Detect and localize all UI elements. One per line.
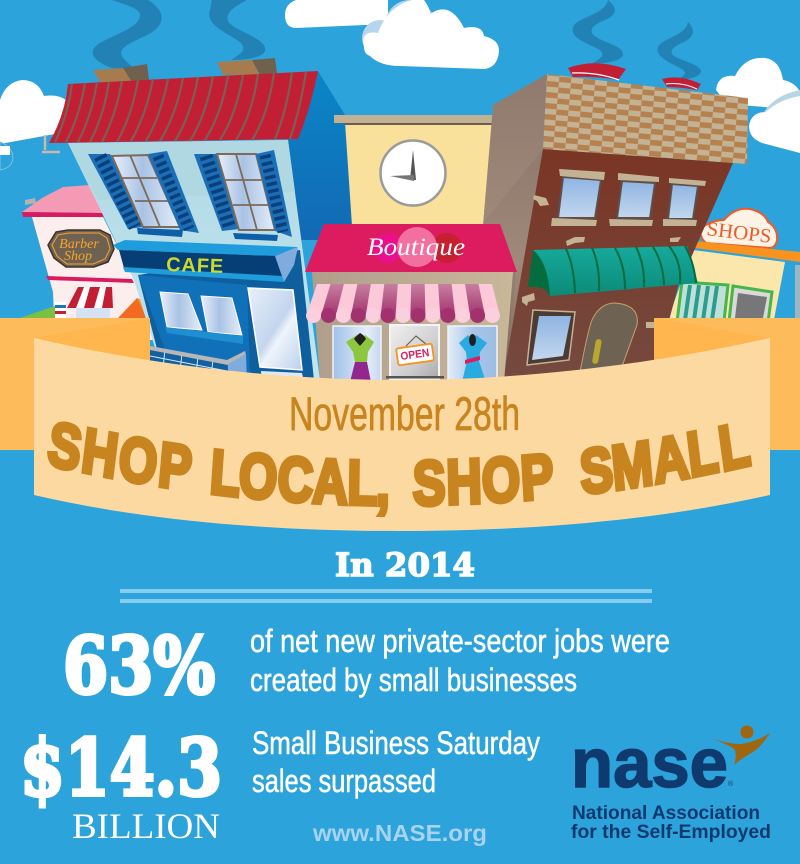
barber awning: [67, 287, 113, 308]
building: clock tower: [334, 115, 505, 226]
umbrella: [118, 298, 168, 326]
smoke: brick right: [658, 22, 701, 80]
cloud: right front edge: [764, 90, 800, 113]
cafe sign underline: [123, 267, 284, 282]
green hill: [20, 306, 55, 325]
clock: [380, 140, 446, 206]
cafe left window group: [88, 151, 199, 237]
brick facade: [503, 149, 733, 380]
logo wordmark: nase: [571, 724, 728, 802]
barber sign: [48, 230, 114, 267]
window 2: [609, 173, 659, 226]
open sign: OPEN: [400, 347, 430, 363]
main headline: SHOP LOCAL, SHOP SMALL: [44, 408, 754, 519]
stat: 63 percent description: created by small businesses: [250, 662, 577, 698]
antenna: [42, 135, 60, 152]
chimney left: [93, 64, 149, 82]
left window muntins: [120, 155, 168, 227]
shops window left: [676, 282, 728, 330]
stat: 14.3: $14.3: [20, 723, 222, 814]
barber wall: [32, 217, 155, 340]
stat: 63 percent description: of net new private-sector jobs were: [250, 623, 670, 659]
awning ribs: [566, 246, 696, 293]
banner right fold shade: [654, 318, 770, 364]
cloud: right back: [716, 58, 800, 110]
smoke: brick left: [573, 0, 623, 64]
barber awning stripes: [67, 287, 113, 308]
logo name: for the Self-Employed: [571, 822, 771, 843]
cafe side wall: [288, 71, 354, 240]
right window sill: [233, 233, 278, 241]
chimney right: [217, 58, 277, 75]
brick lower side: [484, 149, 543, 380]
cafe lower window right: [201, 296, 242, 335]
cafe lower window left: [160, 292, 202, 330]
far right grey building: [795, 265, 800, 320]
cafe lower right pane: [138, 275, 250, 375]
shops window blind: [735, 293, 767, 318]
cloud: top centre front: [363, 0, 499, 69]
barber ledge: [46, 276, 134, 283]
window base bar: [386, 376, 444, 378]
door: [580, 303, 637, 372]
shops sign: [700, 209, 777, 248]
right window left shutter: [194, 154, 239, 231]
building: brick block: [483, 63, 748, 380]
exposed bricks: [522, 195, 681, 328]
barber sign text: Barber: [59, 237, 99, 252]
striped awning: [306, 284, 500, 323]
brick side wall: [483, 74, 547, 380]
lower window: [527, 310, 575, 365]
logo registered mark: ®: [728, 780, 734, 788]
shop window left: [333, 326, 381, 382]
clock hands: [410, 150, 416, 180]
banner left fold shade: [34, 318, 150, 364]
window 1: [551, 169, 605, 226]
shop window middle: [390, 325, 439, 379]
barber window: [76, 308, 110, 320]
stat: 14.3 description: Small Business Saturday: [252, 725, 540, 761]
cafe upper facade band: [68, 140, 295, 200]
door handle: [592, 339, 602, 364]
left window right shutter: [148, 151, 199, 233]
double divider: [120, 589, 652, 603]
barber sign border: [52, 233, 110, 264]
stat: 14.3 description: sales surpassed: [252, 763, 436, 799]
nase logo: [571, 724, 771, 843]
clock tower wall: [345, 122, 492, 226]
barber sign text: Shop: [64, 249, 92, 264]
banner: [34, 338, 770, 531]
barber roof trim: [22, 212, 105, 217]
cafe wall cap: [150, 346, 246, 365]
open sign: [396, 336, 434, 365]
cafe sign top: [113, 240, 298, 256]
shops roof bar: [695, 241, 800, 262]
shop window right: [448, 326, 497, 382]
right window right shutter: [256, 150, 292, 237]
cafe wall end: [228, 354, 247, 382]
cafe lower door panel: [261, 371, 304, 382]
stat: 63 percent: 63%: [63, 621, 215, 712]
blue dress: [459, 334, 487, 382]
cafe lower front: [138, 250, 314, 380]
cafe right window group: [194, 150, 292, 241]
year heading: In 2014: [335, 546, 475, 584]
barber pole: [55, 302, 66, 320]
cafe sign band: [119, 250, 282, 276]
website: www.NASE.org: [312, 820, 487, 846]
boutique fascia: [305, 224, 517, 272]
checkered roof: [543, 74, 748, 164]
boutique decorative circles: [373, 227, 462, 267]
cafe sign side: [275, 247, 298, 282]
shops sign text: SHOPS: [705, 218, 773, 248]
cafe door glass: [248, 288, 302, 370]
cafe roof ribs: [55, 72, 306, 142]
building: shops: [664, 209, 800, 330]
cloud: top centre pill: [285, 0, 388, 28]
building: barber shop: [20, 185, 168, 340]
right window muntins: [225, 154, 269, 230]
shops wall: [664, 250, 785, 330]
boutique wall: [312, 272, 513, 382]
building: cafe: [49, 58, 354, 382]
cafe window sills: [165, 327, 243, 344]
window 3: [663, 178, 706, 226]
building: boutique: [305, 224, 517, 382]
left window sill: [137, 228, 183, 237]
cloud: left small cap: [0, 146, 10, 155]
green dress: [346, 333, 374, 382]
cafe brick wall: [150, 347, 227, 382]
shops window right: [728, 286, 772, 330]
barber vent: [25, 198, 36, 205]
smoke plumes: [93, 0, 701, 80]
chimney cap left: [568, 63, 626, 80]
cafe sign text: CAFE: [166, 254, 224, 278]
green awning: [528, 246, 698, 296]
awning end: [528, 250, 550, 296]
stat: billion: BILLION: [72, 806, 220, 846]
logo name: National Association: [572, 803, 760, 824]
date heading: November 28th: [289, 387, 520, 440]
cafe facade: [68, 140, 320, 380]
clock tower ledge: [334, 115, 505, 123]
banner right back fold: [654, 318, 800, 450]
left window glass: [112, 155, 180, 227]
clouds: [0, 0, 800, 170]
logo figure: [711, 726, 770, 765]
chimney cap right: [662, 77, 701, 90]
cafe red roof: [49, 71, 318, 143]
cloud: right front: [749, 96, 800, 153]
cloud: top centre back: [362, 0, 435, 61]
banner left back fold: [0, 318, 150, 450]
smoke: cafe left: [93, 0, 162, 70]
right window glass: [217, 154, 275, 230]
shops window stripes: [685, 285, 717, 320]
smoke: cafe right: [209, 0, 265, 60]
cloud: far left small: [0, 142, 13, 170]
boutique sign text: Boutique: [367, 234, 465, 261]
barber roof: [22, 185, 103, 213]
cloud: left: [0, 80, 66, 144]
left window shutter: [88, 154, 143, 229]
